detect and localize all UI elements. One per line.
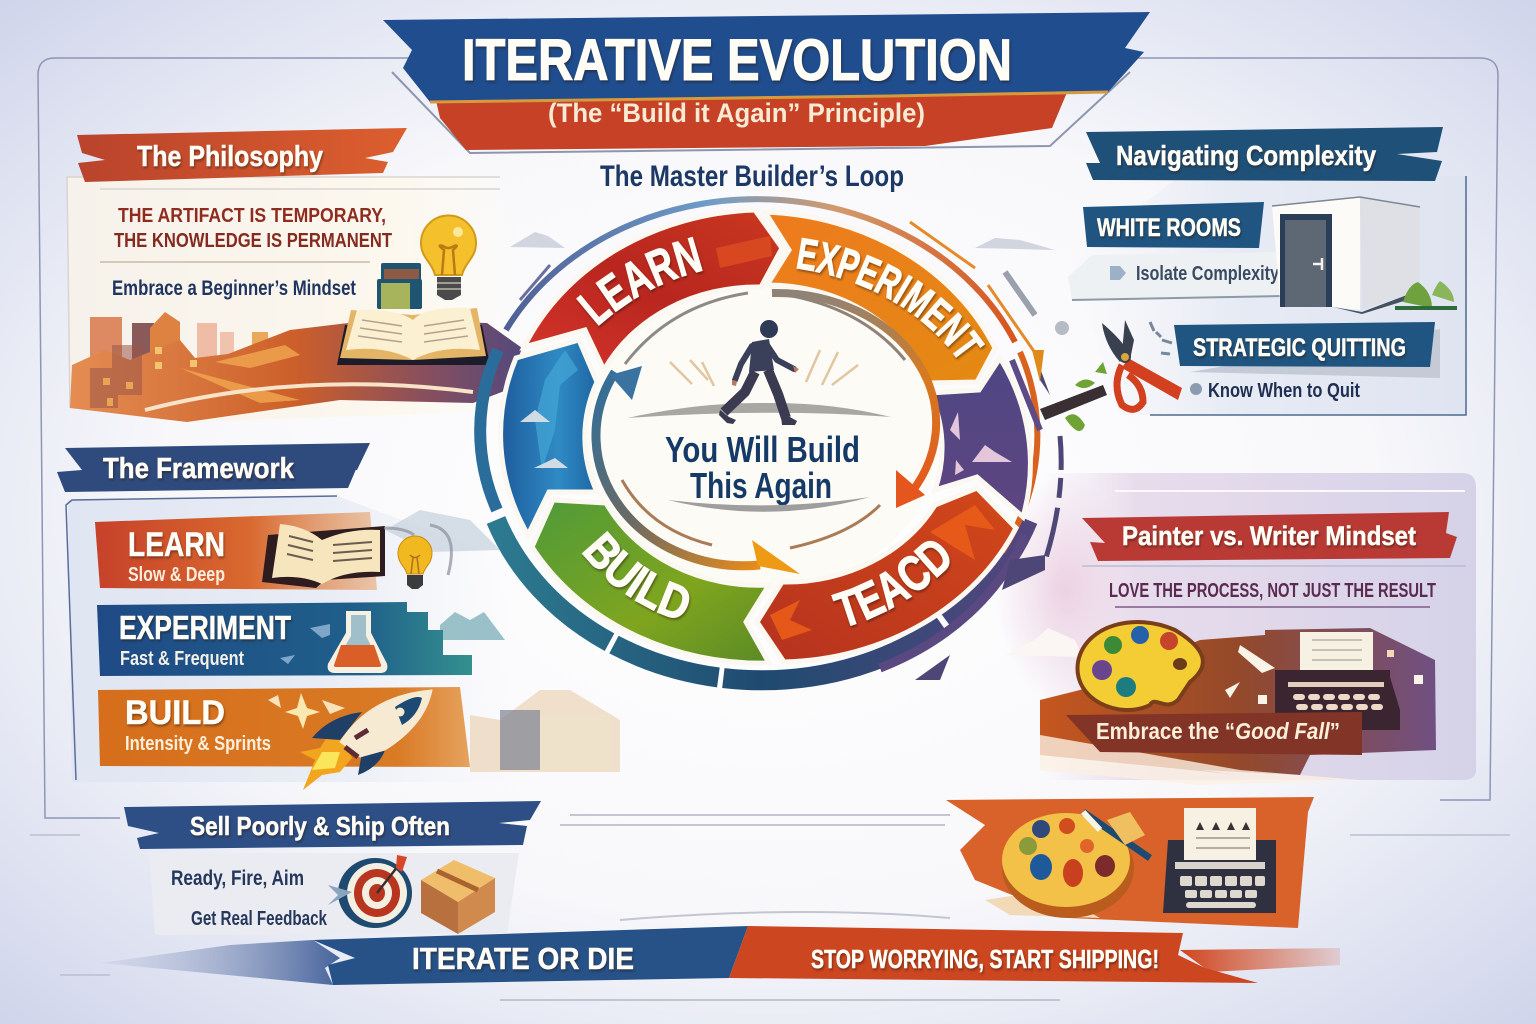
bar: learn: Slow & Deep (128, 564, 225, 586)
main loop wheel (474, 196, 1069, 690)
panel background (67, 177, 540, 422)
center text: This Again (690, 465, 832, 506)
heading ribbon (1082, 512, 1457, 561)
bar: build: Intensity & Sprints (125, 733, 271, 755)
title banner (383, 12, 1150, 153)
strip: isolate complexity: Isolate Complexity (1136, 263, 1280, 285)
text: know when to quit: Know When to Quit (1208, 380, 1360, 402)
red part: STOP WORRYING, START SHIPPING! (811, 944, 1159, 974)
sub ribbon: white rooms (1083, 202, 1264, 248)
ribbon tails (100, 940, 340, 985)
sub text: Embrace a Beginner’s Mindset (112, 277, 356, 300)
panel background (68, 496, 510, 782)
blue part (313, 926, 748, 985)
segment: learn: LEARN (576, 236, 704, 328)
heading ribbon (124, 801, 541, 849)
icon: flask (329, 612, 386, 672)
subtitle ribbon: (The “Build it Again” Principle) (548, 98, 925, 128)
inner ring arrows (596, 293, 936, 566)
segment: teach: TEACD (831, 540, 952, 629)
segment: experiment: EXPERIMENT (796, 238, 987, 360)
title ribbon: ITERATIVE EVOLUTION (462, 28, 1012, 93)
panel: painter vs writer (995, 473, 1476, 785)
heading ribbon (57, 443, 370, 492)
statement text: THE ARTIFACT IS TEMPORARY, (118, 205, 386, 227)
red part (729, 926, 1258, 983)
icon: open book small (262, 524, 385, 588)
ring arrowheads (915, 368, 1050, 680)
bar: experiment (97, 602, 472, 676)
sweep illustration (1040, 628, 1436, 785)
bar: experiment: Fast & Frequent (120, 648, 244, 670)
title ribbon (383, 12, 1150, 102)
loop heading: The Master Builder’s Loop (600, 160, 904, 193)
sub ribbon: strategic quitting: STRATEGIC QUITTING (1193, 334, 1406, 362)
bar: experiment: EXPERIMENT (119, 609, 291, 646)
bar: build (98, 687, 470, 790)
segment: teach (754, 486, 1019, 664)
skyline illustration (70, 312, 522, 422)
bar: learn (95, 512, 385, 590)
heading ribbon: The Framework (103, 453, 295, 485)
panel background (1040, 473, 1476, 780)
icon: palette (1002, 812, 1150, 918)
segment: blue (501, 340, 597, 535)
center text (665, 429, 860, 506)
closing banner (100, 926, 1340, 985)
sub ribbon: white rooms: WHITE ROOMS (1097, 214, 1241, 242)
icon: stacked books (377, 263, 422, 309)
decorative tools (1005, 272, 1069, 335)
panel background (1070, 176, 1466, 415)
statement text (114, 205, 392, 252)
bar: build: BUILD (125, 694, 225, 732)
heading ribbon: Navigating Complexity (1116, 140, 1376, 171)
subtitle ribbon (435, 90, 1068, 150)
bar: learn: LEARN (128, 526, 225, 564)
text: get real feedback: Get Real Feedback (191, 908, 328, 930)
icon: paint palette (1077, 622, 1203, 710)
heading ribbon: Sell Poorly & Ship Often (190, 811, 450, 841)
icon: typewriter (1163, 808, 1276, 913)
inner arrowheads (610, 366, 925, 574)
ribbon: embrace the good fall: Embrace the “Good Fall” (1096, 718, 1340, 744)
icon: box (421, 860, 495, 934)
icon: rocket (300, 690, 432, 790)
icon: light bulb (421, 216, 476, 300)
panel: sell poorly and ship often (124, 801, 541, 935)
icon: target (328, 855, 412, 928)
segment: build (530, 498, 773, 666)
icon: light bulb small (384, 525, 451, 589)
segment: purple (930, 358, 1030, 517)
strip: isolate complexity (1068, 252, 1282, 300)
icon: leaves (1395, 281, 1457, 310)
outer ring (480, 199, 1061, 680)
panel: the framework (57, 443, 620, 790)
heading ribbon: The Philosophy (137, 141, 323, 173)
heading ribbon (1086, 127, 1443, 181)
icon: typewriter (1275, 632, 1400, 730)
sub ribbon: strategic quitting (1174, 322, 1440, 378)
panel: navigating complexity (1040, 127, 1466, 431)
ribbon: embrace the good fall (1066, 712, 1362, 755)
cloud (1005, 628, 1082, 657)
icon: open book (337, 308, 490, 365)
center text: You Will Build (665, 429, 860, 470)
panel: painter and writer illustration (946, 797, 1314, 928)
segment: build: BUILD (582, 530, 692, 621)
segment: learn (519, 208, 784, 368)
panel background (149, 853, 519, 935)
icon: white room (1272, 197, 1420, 314)
panel: the philosophy (67, 128, 540, 422)
blue part: ITERATE OR DIE (412, 941, 634, 976)
decorative mountains (440, 612, 505, 640)
building illustration (470, 690, 620, 772)
text: ready fire aim: Ready, Fire, Aim (171, 867, 304, 890)
heading ribbon: Painter vs. Writer Mindset (1122, 521, 1416, 551)
icon: pruning shears and branch (1040, 320, 1182, 431)
central figure walking (627, 320, 891, 425)
white disc (583, 281, 939, 591)
background clouds (510, 232, 1055, 250)
heading ribbon (77, 128, 407, 182)
statement text: THE KNOWLEDGE IS PERMANENT (114, 230, 392, 252)
